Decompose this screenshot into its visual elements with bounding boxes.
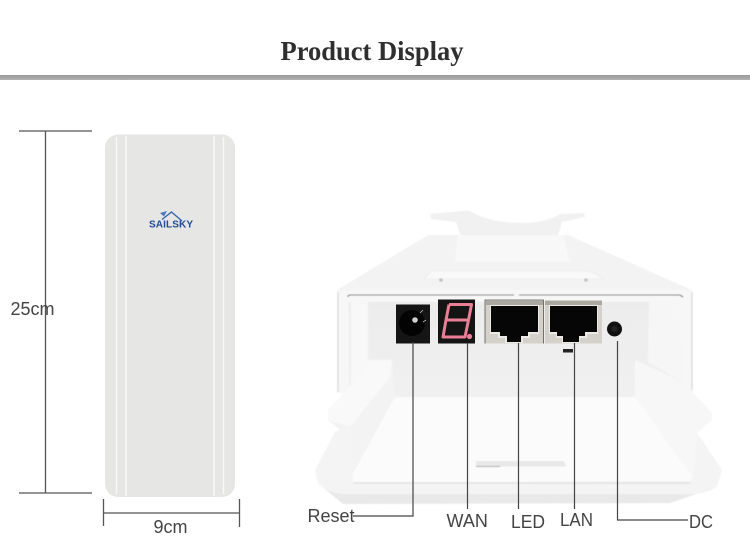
- pole mount clip: [430, 210, 585, 262]
- leader line and label: LED: LED: [511, 512, 545, 532]
- width dimension: 9cm: [104, 499, 240, 537]
- logo: SAILSKY: SAILSKY: [149, 220, 193, 230]
- title: Product Display: [280, 36, 464, 66]
- enclosure frame: [337, 290, 693, 393]
- port: WAN ethernet: [485, 300, 544, 344]
- leader line and label: WAN: WAN: [446, 511, 488, 531]
- leader line and label: DC: [618, 341, 713, 532]
- width dimension: 9cm: 9cm: [154, 517, 188, 537]
- leader line and label: DC: DC: [689, 512, 713, 532]
- device: rear view with open port cover: [315, 210, 722, 504]
- right cover wing: [635, 360, 712, 477]
- height dimension: 25cm: [10, 131, 92, 493]
- device: front view of antenna: [105, 134, 235, 497]
- enclosure seam: [348, 295, 683, 297]
- port: DC socket: [607, 322, 622, 336]
- leader line and label: Reset: Reset: [308, 506, 355, 526]
- back wall: [349, 302, 683, 400]
- small status indicator: [563, 349, 573, 352]
- port: reset / power jack: [396, 304, 430, 344]
- base of the cover: [315, 425, 722, 504]
- top housing: [337, 235, 692, 290]
- leader line and label: Reset: [308, 342, 413, 526]
- cover floor: [353, 397, 693, 483]
- port: LAN ethernet: [545, 300, 602, 344]
- tray slot: [476, 461, 566, 466]
- port: seven-segment LED display: [438, 300, 475, 344]
- header divider bar: [0, 75, 750, 80]
- left cover wing: [328, 360, 395, 473]
- logo: SAILSKY: [149, 211, 193, 230]
- height dimension: 25cm: 25cm: [10, 299, 55, 319]
- leader line and label: LAN: LAN: [560, 510, 593, 530]
